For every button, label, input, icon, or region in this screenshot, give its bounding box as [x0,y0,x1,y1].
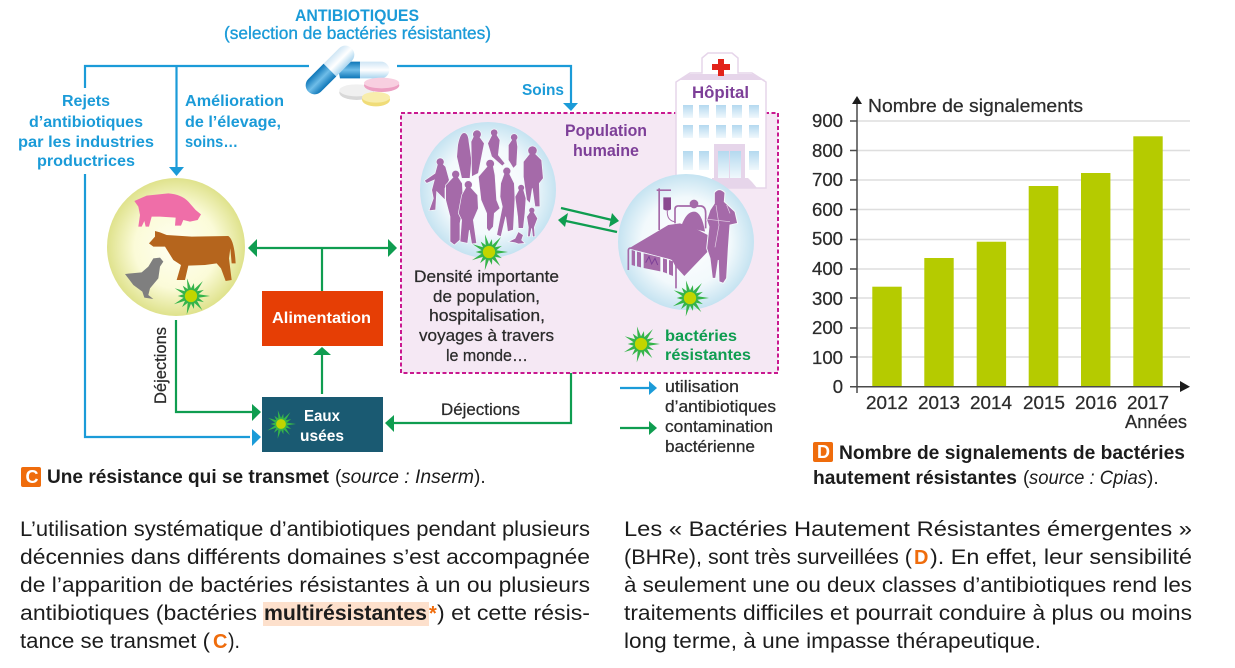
text block: left paragraph: ) et cette résis- [437,601,590,625]
bar chart: nombre de signalements: 100 [812,347,843,368]
caption: C: C [26,467,38,487]
bar chart: nombre de signalements: 500 [812,228,843,249]
text block: right paragraph: Les « Bactéries Hautement Résistantes émergentes » [624,517,1192,541]
box: alimentation: Alimentation [272,310,371,327]
bar chart: nombre de signalements: 600 [812,199,843,220]
legend: bactéries résistantes: résistantes [665,347,751,364]
bar chart: nombre de signalements: 2012 [866,392,908,413]
text block: right paragraph [624,517,1192,653]
text block: right paragraph: traitements difficiles et pourrait conduire à plus ou moins [624,601,1192,625]
text: densité importante: le monde… [446,347,528,365]
highlight: multirésistantes [263,602,429,626]
bar chart: nombre de signalements: 200 [812,317,843,338]
text: densité importante: de population, [433,288,540,306]
arrows: exchange [558,208,619,232]
text block: left paragraph: décennies dans différents domaines s’est accompagnée [20,545,590,569]
bar chart: nombre de signalements: 400 [812,258,843,279]
caption: D: ). [1147,468,1159,489]
label: amélioration de l'élevage: Amélioration [185,93,284,110]
legend: bactéries résistantes: bactéries [665,328,737,345]
legend: bactéries résistantes [624,326,751,364]
text block: left paragraph: C [213,631,227,653]
text: densité importante: Densité importante [414,268,559,286]
icon: hospital [676,53,766,188]
title: antibiotiques: (selection de bactéries résistantes) [224,23,491,43]
caption: D: Nombre de signalements de bactéries [839,443,1185,464]
caption: C: ). [474,467,486,488]
icon: patient in bed with doctor [618,174,754,317]
bar chart: nombre de signalements: 0 [833,376,843,397]
bar chart: nombre de signalements: 2014 [970,392,1012,413]
bar chart: nombre de signalements: 2013 [918,392,960,413]
box: eaux usées: usées [300,428,344,445]
icon: hospital: Hôpital [692,84,749,102]
text block: left paragraph: ). [228,629,240,653]
text block: left paragraph: tance se transmet ( [20,629,211,653]
title: antibiotiques: ANTIBIOTIQUES [295,6,419,25]
label: amélioration de l'élevage: soins… [185,134,238,151]
icon: pills [302,42,399,106]
text block: right paragraph: long terme, à une impasse thérapeutique. [624,629,1041,653]
blue arrows: antibiotic use [85,66,578,446]
text block: right paragraph: (BHRe), sont très surveillées ( [624,545,913,569]
bar chart: nombre de signalements: 800 [812,140,843,161]
text block: left paragraph [20,517,590,653]
text: densité importante [414,268,559,365]
icon: crowd [420,122,556,271]
label: rejets d'antibiotiques: Rejets [62,93,110,110]
box: eaux usées: Eaux [304,408,340,425]
bar chart: nombre de signalements [812,95,1190,432]
text block: right paragraph: ). En effet, leur sensibilité [930,545,1192,569]
icon: cow [149,231,236,281]
bar chart: nombre de signalements: Nombre de signalements [868,95,1083,116]
caption: C [21,467,486,488]
legend: arrows [620,378,776,456]
caption: D: source : Cpias [1029,468,1147,489]
caption: D: D [817,442,830,462]
label: rejets d'antibiotiques: productrices [37,153,135,170]
caption: C: Une résistance qui se transmet [47,467,330,488]
caption: D: ( [1023,468,1030,489]
label: rejets d'antibiotiques: d’antibiotiques [29,114,143,131]
text block: left paragraph: de l’apparition de bactéries résistantes à un ou plusieurs [20,573,590,597]
legend: arrows: contamination [665,418,773,436]
label: population humaine [565,122,647,160]
text block: right paragraph: à seulement une ou deux classes d’antibiotiques rend les [624,573,1192,597]
bar chart: nombre de signalements: 900 [812,110,843,131]
label: population humaine: humaine [573,142,639,160]
caption: D [813,442,1185,489]
label: soins: Soins [522,82,564,99]
caption: D: hautement résistantes [813,468,1017,489]
bar chart: nombre de signalements: 300 [812,288,843,309]
text block: right paragraph: D [914,547,928,569]
bar chart: nombre de signalements: 2015 [1023,392,1065,413]
legend: arrows: utilisation [665,378,739,396]
text block: left paragraph: multirésistantes [264,601,427,625]
bar chart: nombre de signalements: 2017 [1127,392,1169,413]
box: alimentation [262,291,383,346]
bar chart: nombre de signalements: Années [1125,411,1187,432]
text block: left paragraph: * [429,603,437,625]
label: amélioration de l'élevage [185,93,284,151]
caption: C: source : Inserm [341,467,474,488]
text: densité importante: voyages à travers [419,327,554,345]
text block: left paragraph: antibiotiques (bactéries [20,601,257,625]
icon: pig [134,193,201,227]
icon: chicken [125,258,163,299]
text: densité importante: hospitalisation, [429,307,545,325]
title: antibiotiques [224,6,491,43]
label: population humaine: Population [565,122,647,140]
bar chart: nombre de signalements: 700 [812,169,843,190]
label: amélioration de l'élevage: de l’élevage, [185,114,281,131]
label: déjections vertical: Déjections [152,327,170,404]
text block: left paragraph: L’utilisation systématique d’antibiotiques pendant plusieurs [20,517,590,541]
panel: population humaine [401,53,778,373]
bar chart: nombre de signalements: 2016 [1075,392,1117,413]
box: eaux usées [262,397,383,452]
legend: arrows: d’antibiotiques [665,398,776,416]
label: déjections horizontal: Déjections [441,401,520,419]
label: rejets d'antibiotiques: par les industries [18,134,154,151]
legend: arrows: bactérienne [665,438,755,456]
label: rejets d'antibiotiques [18,93,154,170]
caption: C: ( [335,467,342,488]
icon: animals circle [107,178,245,316]
green arrows: bacterial contamination [176,239,571,432]
